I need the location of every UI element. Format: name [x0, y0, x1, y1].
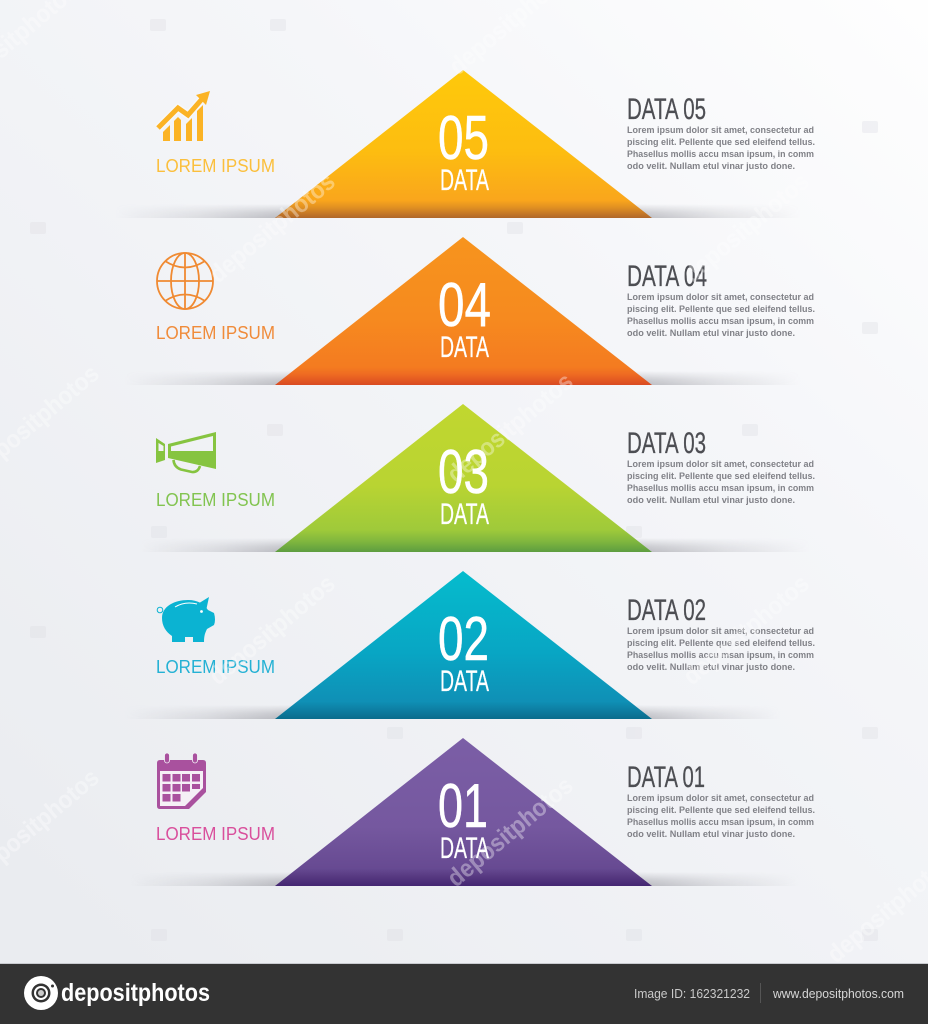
number 02: 02: [438, 605, 489, 674]
triangle 05: [275, 70, 652, 218]
footer bar: [0, 963, 928, 1024]
logo: camera mark: [24, 976, 58, 1010]
shadow band 05: [142, 206, 774, 218]
body text 02: [627, 626, 815, 673]
triangle 01: [275, 738, 652, 886]
number 01: 01: [438, 772, 488, 841]
body text 01: [627, 793, 815, 840]
body text 03: Phasellus mollis accu msan ipsum, in comm: [627, 483, 814, 494]
body text 04: Lorem ipsum dolor sit amet, consectetur ad: [627, 292, 814, 303]
body text 04: [627, 292, 815, 339]
panel: step 05: [115, 70, 815, 218]
triangle label 02: DATA: [440, 665, 489, 698]
body text 02: piscing elit. Pellente que sed eleifend tellus.: [627, 638, 815, 649]
body text 03: odo velit. Nullam etul vinar justo done.: [627, 495, 795, 506]
watermarks: depositphotos: [442, 772, 579, 893]
watermarks: depositphotos: [678, 570, 815, 691]
watermarks: depositphotos: [678, 168, 815, 289]
body text 03: [627, 459, 815, 506]
body text 03: Lorem ipsum dolor sit amet, consectetur ad: [627, 459, 814, 470]
panel: step 01: [130, 738, 815, 886]
label: lorem ipsum 02: LOREM IPSUM: [156, 657, 275, 677]
heading 01: DATA 01: [627, 761, 705, 794]
shadow band 01: [158, 874, 774, 886]
body text 01: Lorem ipsum dolor sit amet, consectetur ad: [627, 793, 814, 804]
label: lorem ipsum 03: LOREM IPSUM: [156, 490, 275, 510]
body text 05: piscing elit. Pellente que sed eleifend tellus.: [627, 137, 815, 148]
label: lorem ipsum 05: LOREM IPSUM: [156, 156, 275, 176]
logo: wordmark: depositphotos: [61, 979, 210, 1007]
shadow band 03: [166, 540, 783, 552]
body text 05: odo velit. Nullam etul vinar justo done.: [627, 161, 795, 172]
icon: globe: [157, 253, 213, 309]
triangle label 05: DATA: [440, 164, 489, 197]
icon: piggy bank: [157, 597, 215, 642]
number 04: 04: [438, 271, 491, 340]
body text 05: [627, 125, 815, 172]
body text 01: Phasellus mollis accu msan ipsum, in comm: [627, 817, 814, 828]
number 05: 05: [438, 104, 489, 173]
body text 02: Lorem ipsum dolor sit amet, consectetur ad: [627, 626, 814, 637]
body text 04: piscing elit. Pellente que sed eleifend tellus.: [627, 304, 815, 315]
body text 03: piscing elit. Pellente que sed eleifend tellus.: [627, 471, 815, 482]
body text 01: piscing elit. Pellente que sed eleifend tellus.: [627, 805, 815, 816]
body text 02: odo velit. Nullam etul vinar justo done.: [627, 662, 795, 673]
body text 04: odo velit. Nullam etul vinar justo done.: [627, 328, 795, 339]
panel: step 02: [125, 571, 815, 719]
triangle 02: [275, 571, 652, 719]
watermarks: depositphotos: [204, 570, 341, 691]
triangle label 04: DATA: [440, 331, 489, 364]
panel: step 03: [140, 404, 815, 552]
heading 05: DATA 05: [627, 93, 706, 126]
heading 03: DATA 03: [627, 427, 706, 460]
heading 04: DATA 04: [627, 260, 707, 293]
number 03: 03: [438, 438, 489, 507]
image id: Image ID: 162321232: [634, 987, 750, 1001]
icon: megaphone: [156, 432, 216, 472]
watermarks: depositphotos: [204, 168, 341, 289]
body text 02: Phasellus mollis accu msan ipsum, in comm: [627, 650, 814, 661]
triangle label 03: DATA: [440, 498, 489, 531]
triangle 03: [275, 404, 652, 552]
label: lorem ipsum 04: LOREM IPSUM: [156, 323, 275, 343]
watermarks: depositphotos: [442, 368, 579, 489]
heading 02: DATA 02: [627, 594, 706, 627]
shadow band 04: [152, 372, 774, 385]
body text 05: Phasellus mollis accu msan ipsum, in comm: [627, 149, 814, 160]
label: lorem ipsum 01: LOREM IPSUM: [156, 824, 275, 844]
body text 04: Phasellus mollis accu msan ipsum, in comm: [627, 316, 814, 327]
triangle 04: [275, 237, 652, 385]
triangle label 01: DATA: [440, 832, 489, 865]
panel: step 04: [125, 237, 815, 385]
body text 05: Lorem ipsum dolor sit amet, consectetur ad: [627, 125, 814, 136]
website: www.depositphotos.com: [772, 987, 904, 1001]
icon: calendar: [157, 753, 206, 809]
shadow band 02: [152, 706, 756, 719]
body text 01: odo velit. Nullam etul vinar justo done.: [627, 829, 795, 840]
icon: rising bar chart: [158, 91, 210, 141]
